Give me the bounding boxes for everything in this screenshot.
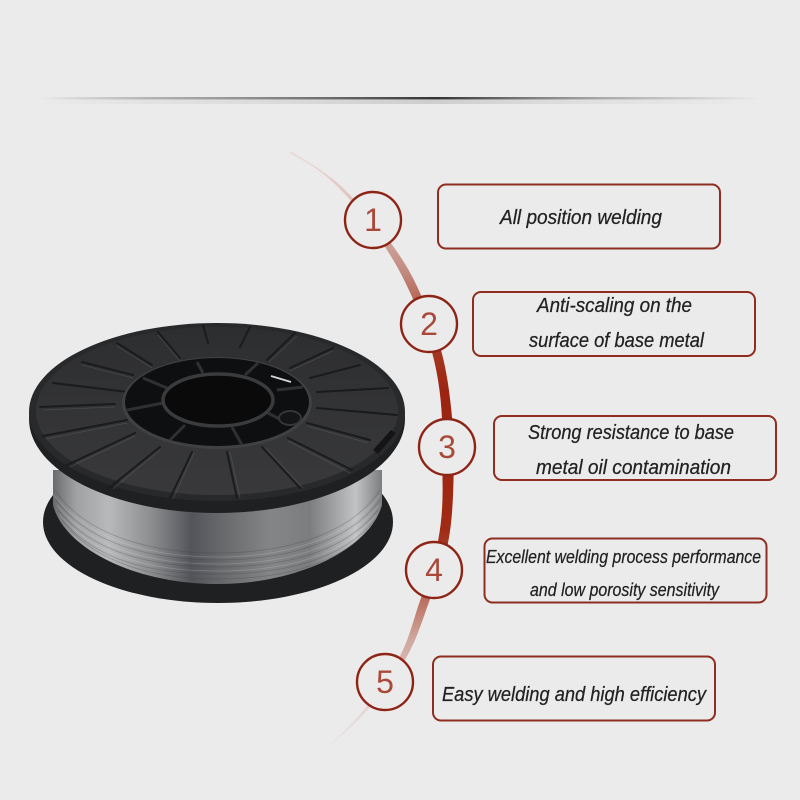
item 3 bbox=[419, 416, 776, 480]
label box 1: All position welding bbox=[499, 207, 662, 229]
flange ribs bbox=[40, 325, 397, 498]
spool top flange bbox=[29, 323, 405, 513]
wire coil bbox=[53, 470, 382, 584]
label box 4: and low porosity sensitivity bbox=[530, 579, 721, 600]
number circle 2: 2 bbox=[420, 306, 438, 342]
number circle 3: 3 bbox=[438, 429, 456, 465]
label box 3: Strong resistance to base bbox=[528, 422, 734, 444]
centre core bbox=[163, 374, 273, 426]
label box 5: Easy welding and high efficiency bbox=[442, 684, 707, 706]
label box 4: Excellent welding process performance bbox=[486, 546, 761, 567]
number circle 5 bbox=[357, 654, 413, 710]
number circle 2 bbox=[401, 296, 457, 352]
item 1 bbox=[345, 184, 720, 248]
top divider line bbox=[40, 97, 760, 104]
product photo: wire spool bbox=[29, 323, 405, 603]
number circle 5: 5 bbox=[376, 664, 394, 700]
hub spokes bbox=[127, 362, 303, 445]
number circle 1: 1 bbox=[364, 202, 382, 238]
label box 3: metal oil contamination bbox=[536, 457, 731, 479]
label box 4 bbox=[484, 538, 766, 602]
item 4 bbox=[406, 538, 766, 602]
number circle 3 bbox=[419, 419, 475, 475]
number circle 4: 4 bbox=[425, 552, 443, 588]
label box 3 bbox=[494, 416, 776, 480]
number circle 1 bbox=[345, 192, 401, 248]
white mark bbox=[271, 376, 291, 382]
label box 2 bbox=[473, 292, 755, 356]
hub hole bbox=[279, 411, 301, 425]
number circle 4 bbox=[406, 542, 462, 598]
item 5 bbox=[357, 654, 715, 720]
spool bottom flange bbox=[43, 441, 393, 603]
rim slot bbox=[373, 430, 396, 454]
curved timeline arc bbox=[289, 151, 454, 757]
label box 2: surface of base metal bbox=[529, 330, 705, 352]
hub opening bbox=[122, 357, 312, 449]
label box 2: Anti-scaling on the bbox=[536, 295, 692, 317]
item 2 bbox=[401, 292, 755, 356]
label box 5 bbox=[433, 656, 715, 720]
label box 1 bbox=[438, 184, 720, 248]
